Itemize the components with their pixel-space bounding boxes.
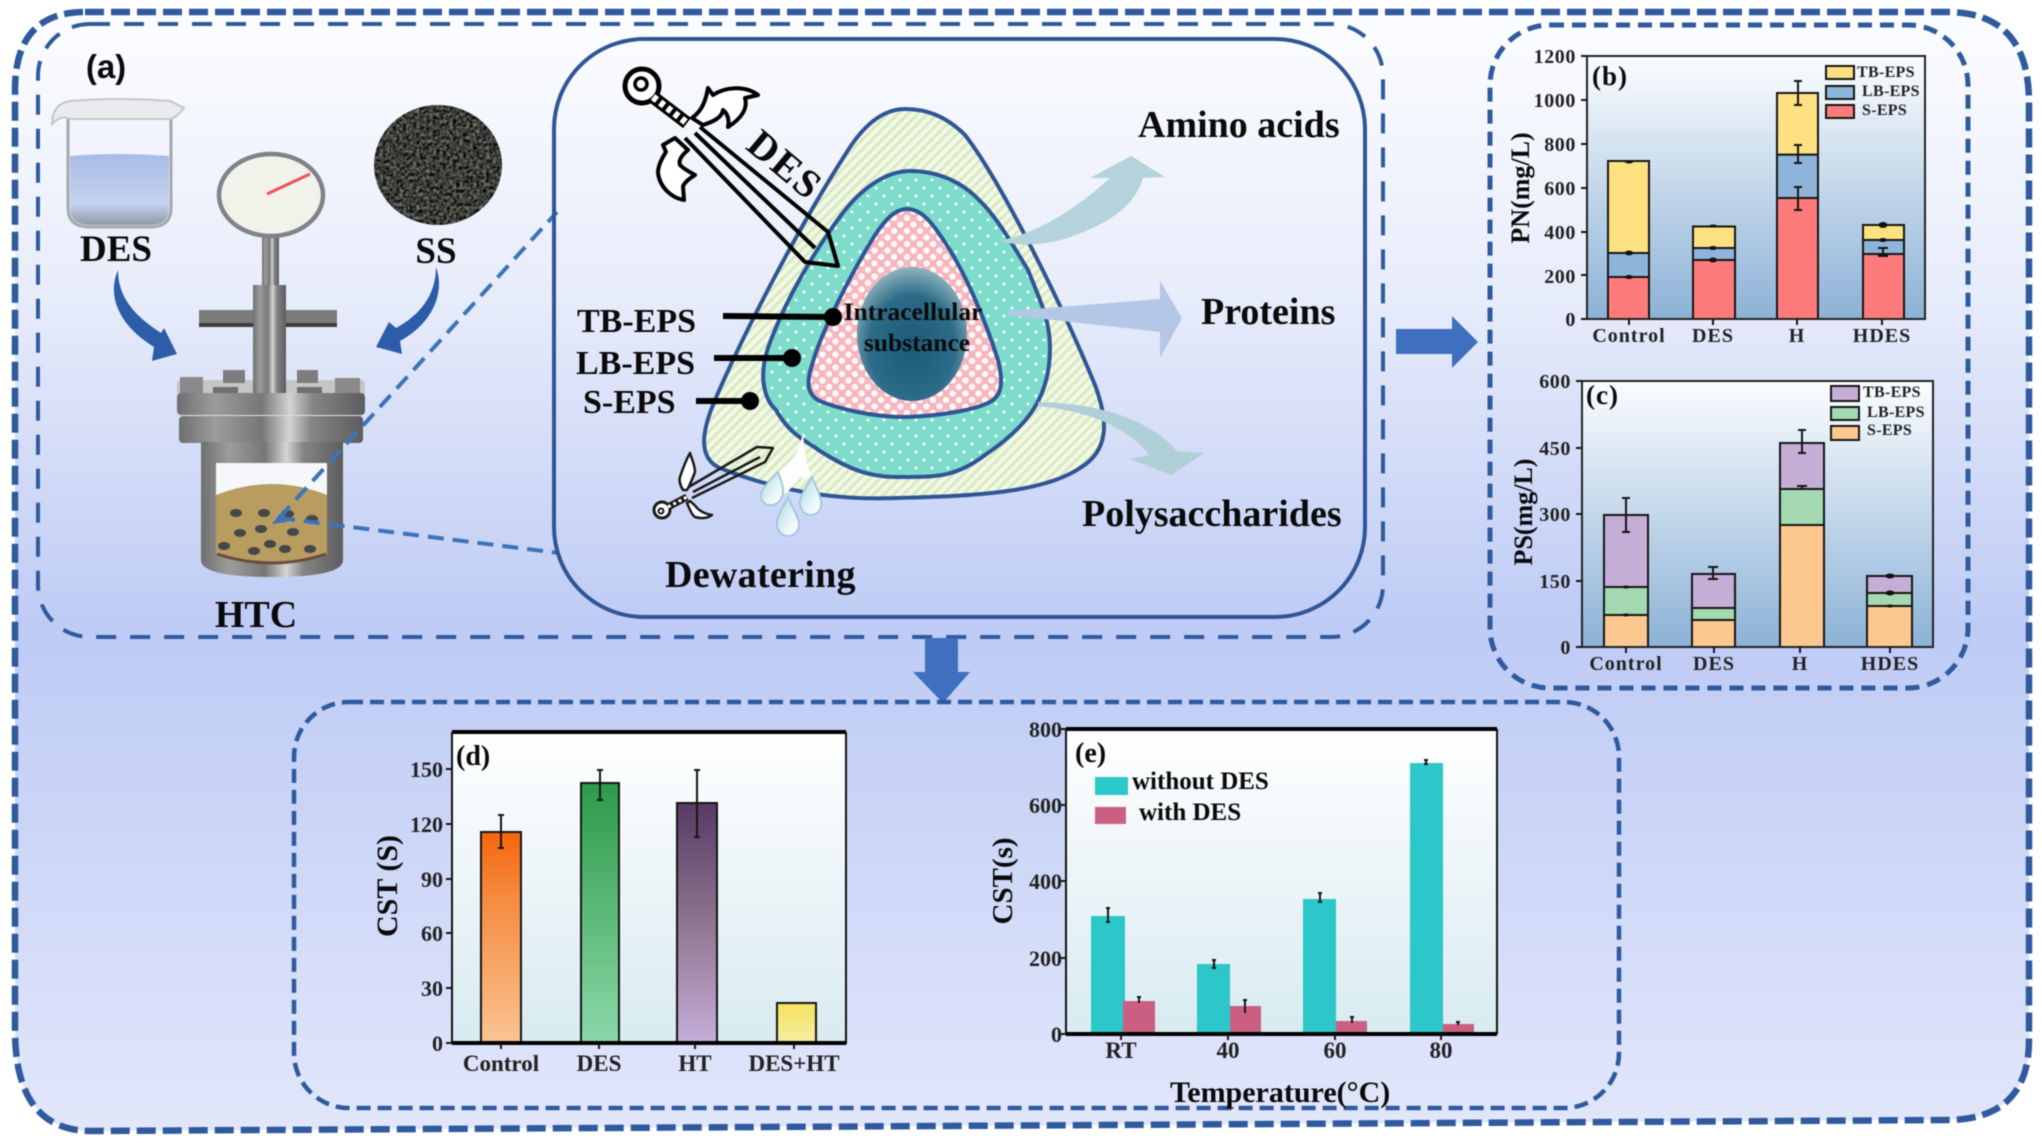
label and pointer: LB-EPS: LB-EPS bbox=[576, 345, 695, 382]
heading: (a): (a) bbox=[86, 48, 126, 85]
icon: hydrothermal reactor bbox=[177, 154, 365, 577]
chart (e): CST vs temperature: 400 bbox=[1029, 869, 1062, 894]
chart (c): PS stacked bars bbox=[1509, 371, 1933, 675]
chart (d): CST bars: 30 bbox=[421, 976, 443, 1001]
chart (e): CST vs temperature: (e) bbox=[1075, 738, 1106, 769]
icon: large DES sword bbox=[625, 69, 838, 266]
chart (d): CST bars: 90 bbox=[421, 867, 443, 892]
arrow: to panels b and c bbox=[1396, 316, 1478, 368]
cell: TB-EPS inner layer bbox=[808, 209, 1001, 417]
label: amino acids: Amino acids bbox=[1138, 104, 1340, 146]
cell: S-EPS outer layer bbox=[704, 109, 1104, 498]
chart (e): CST vs temperature: Temperature(°C) bbox=[1170, 1076, 1390, 1109]
label: proteins: Proteins bbox=[1201, 291, 1335, 333]
chart (e): CST vs temperature bbox=[987, 717, 1497, 1109]
chart (c): PS stacked bars: DES bbox=[1693, 653, 1735, 675]
label: polysaccharides: Polysaccharides bbox=[1082, 493, 1342, 535]
panel: (a) dashed frame bbox=[38, 24, 1383, 637]
label and pointer: S-EPS bbox=[583, 384, 759, 421]
label: DES: DES bbox=[80, 229, 152, 270]
chart (e): CST vs temperature: 0 bbox=[1051, 1022, 1062, 1047]
arrow: DES into reactor bbox=[114, 270, 177, 361]
chart (b): PN stacked bars bbox=[1506, 46, 1925, 347]
label and pointer: LB-EPS bbox=[576, 345, 801, 382]
chart (b): PN stacked bars: H bbox=[1789, 325, 1805, 347]
chart (c): PS stacked bars: 450 bbox=[1539, 438, 1571, 460]
chart (c): PS stacked bars: (c) bbox=[1586, 380, 1619, 410]
chart (b): PN stacked bars: HDES bbox=[1853, 325, 1911, 347]
arrow: to amino acids bbox=[1003, 156, 1165, 244]
chart (e): CST vs temperature: 80 bbox=[1430, 1038, 1452, 1063]
chart (b): PN stacked bars: DES bbox=[1692, 325, 1734, 347]
chart (e): CST vs temperature: RT bbox=[1105, 1038, 1137, 1063]
chart (d): CST bars: Control bbox=[463, 1051, 539, 1076]
label: DES on sword: DES bbox=[739, 120, 832, 209]
chart (b): PN stacked bars: 400 bbox=[1544, 222, 1576, 244]
chart (b): PN stacked bars: 1200 bbox=[1534, 46, 1576, 68]
chart (b): PN stacked bars: S-EPS bbox=[1862, 102, 1907, 119]
chart (e): CST vs temperature: 200 bbox=[1029, 946, 1062, 971]
chart (b): PN stacked bars: TB-EPS bbox=[1857, 64, 1915, 81]
label: HTC: HTC bbox=[215, 594, 297, 636]
chart (b): PN stacked bars: LB-EPS bbox=[1862, 83, 1920, 100]
chart (e): CST vs temperature: without DES bbox=[1132, 768, 1269, 795]
chart (c): PS stacked bars: LB-EPS bbox=[1867, 404, 1925, 421]
chart (d): CST bars: CST (S) bbox=[371, 835, 404, 937]
chart (d): CST bars: 0 bbox=[432, 1031, 443, 1056]
chart (d): CST bars: HT bbox=[678, 1051, 712, 1076]
panel: d and e dashed frame bbox=[294, 702, 1619, 1108]
zoom lines from reactor to cell bbox=[272, 212, 559, 553]
chart (d): CST bars: DES+HT bbox=[748, 1051, 840, 1076]
icon: beaker of DES bbox=[52, 99, 184, 227]
text: intracellular substance: Intracellular bbox=[844, 297, 982, 326]
panel: b and c dashed frame bbox=[1490, 25, 1968, 688]
chart (c): PS stacked bars: 0 bbox=[1560, 637, 1571, 659]
chart (c): PS stacked bars: 300 bbox=[1539, 504, 1571, 526]
arrow: to panels d and e bbox=[913, 638, 970, 703]
label and pointer: S-EPS: S-EPS bbox=[583, 384, 676, 421]
chart (d): CST bars: 150 bbox=[410, 757, 443, 782]
icon: sewage sludge sample bbox=[374, 105, 502, 225]
chart (e): CST vs temperature: 600 bbox=[1029, 793, 1062, 818]
arrow: to polysaccharides bbox=[1038, 402, 1204, 475]
chart (b): PN stacked bars: 200 bbox=[1544, 266, 1576, 288]
chart (b): PN stacked bars: Control bbox=[1592, 325, 1666, 347]
chart (e): CST vs temperature: 60 bbox=[1324, 1038, 1346, 1063]
arrow: SS into reactor bbox=[376, 267, 439, 354]
chart (d): CST bars: 120 bbox=[410, 812, 443, 837]
chart (b): PN stacked bars: 0 bbox=[1565, 309, 1576, 331]
chart (e): CST vs temperature: 800 bbox=[1029, 717, 1062, 742]
cell: LB-EPS middle layer bbox=[763, 171, 1050, 477]
label: SS: SS bbox=[415, 231, 457, 272]
chart (b): PN stacked bars: 600 bbox=[1544, 178, 1576, 200]
chart (e): CST vs temperature: CST(s) bbox=[987, 837, 1019, 925]
arrow: to proteins bbox=[1008, 281, 1182, 358]
chart (c): PS stacked bars: Control bbox=[1589, 653, 1663, 675]
chart (c): PS stacked bars: H bbox=[1792, 653, 1808, 675]
chart (c): PS stacked bars: TB-EPS bbox=[1863, 384, 1921, 401]
chart (d): CST bars: DES bbox=[577, 1051, 621, 1076]
chart (d): CST bars: (d) bbox=[456, 741, 490, 772]
chart (b): PN stacked bars: 800 bbox=[1544, 134, 1576, 156]
chart (d): CST bars: 60 bbox=[421, 921, 443, 946]
chart (e): CST vs temperature: with DES bbox=[1139, 799, 1241, 826]
icon: water drops bbox=[761, 431, 821, 536]
label and pointer: TB-EPS: TB-EPS bbox=[577, 303, 696, 340]
cell: nucleus bbox=[857, 267, 967, 401]
chart (c): PS stacked bars: PS(mg/L) bbox=[1509, 459, 1538, 565]
chart (c): PS stacked bars: 600 bbox=[1539, 371, 1571, 393]
chart (b): PN stacked bars: (b) bbox=[1592, 61, 1628, 91]
chart (c): PS stacked bars: S-EPS bbox=[1867, 422, 1912, 439]
label: dewatering: Dewatering bbox=[665, 554, 856, 596]
label and pointer: TB-EPS bbox=[577, 303, 842, 340]
chart (b): PN stacked bars: PN(mg/L) bbox=[1506, 132, 1535, 244]
chart (e): CST vs temperature: 40 bbox=[1216, 1038, 1240, 1063]
text: intracellular substance: substance bbox=[864, 328, 970, 357]
icon: small sword bbox=[654, 447, 773, 518]
chart (c): PS stacked bars: 150 bbox=[1539, 571, 1571, 593]
text: intracellular substance bbox=[844, 297, 982, 357]
chart (c): PS stacked bars: HDES bbox=[1861, 653, 1919, 675]
chart (d): CST bars bbox=[371, 732, 846, 1076]
chart (b): PN stacked bars: 1000 bbox=[1534, 90, 1576, 112]
panel: EPS cell diagram frame bbox=[554, 39, 1365, 617]
